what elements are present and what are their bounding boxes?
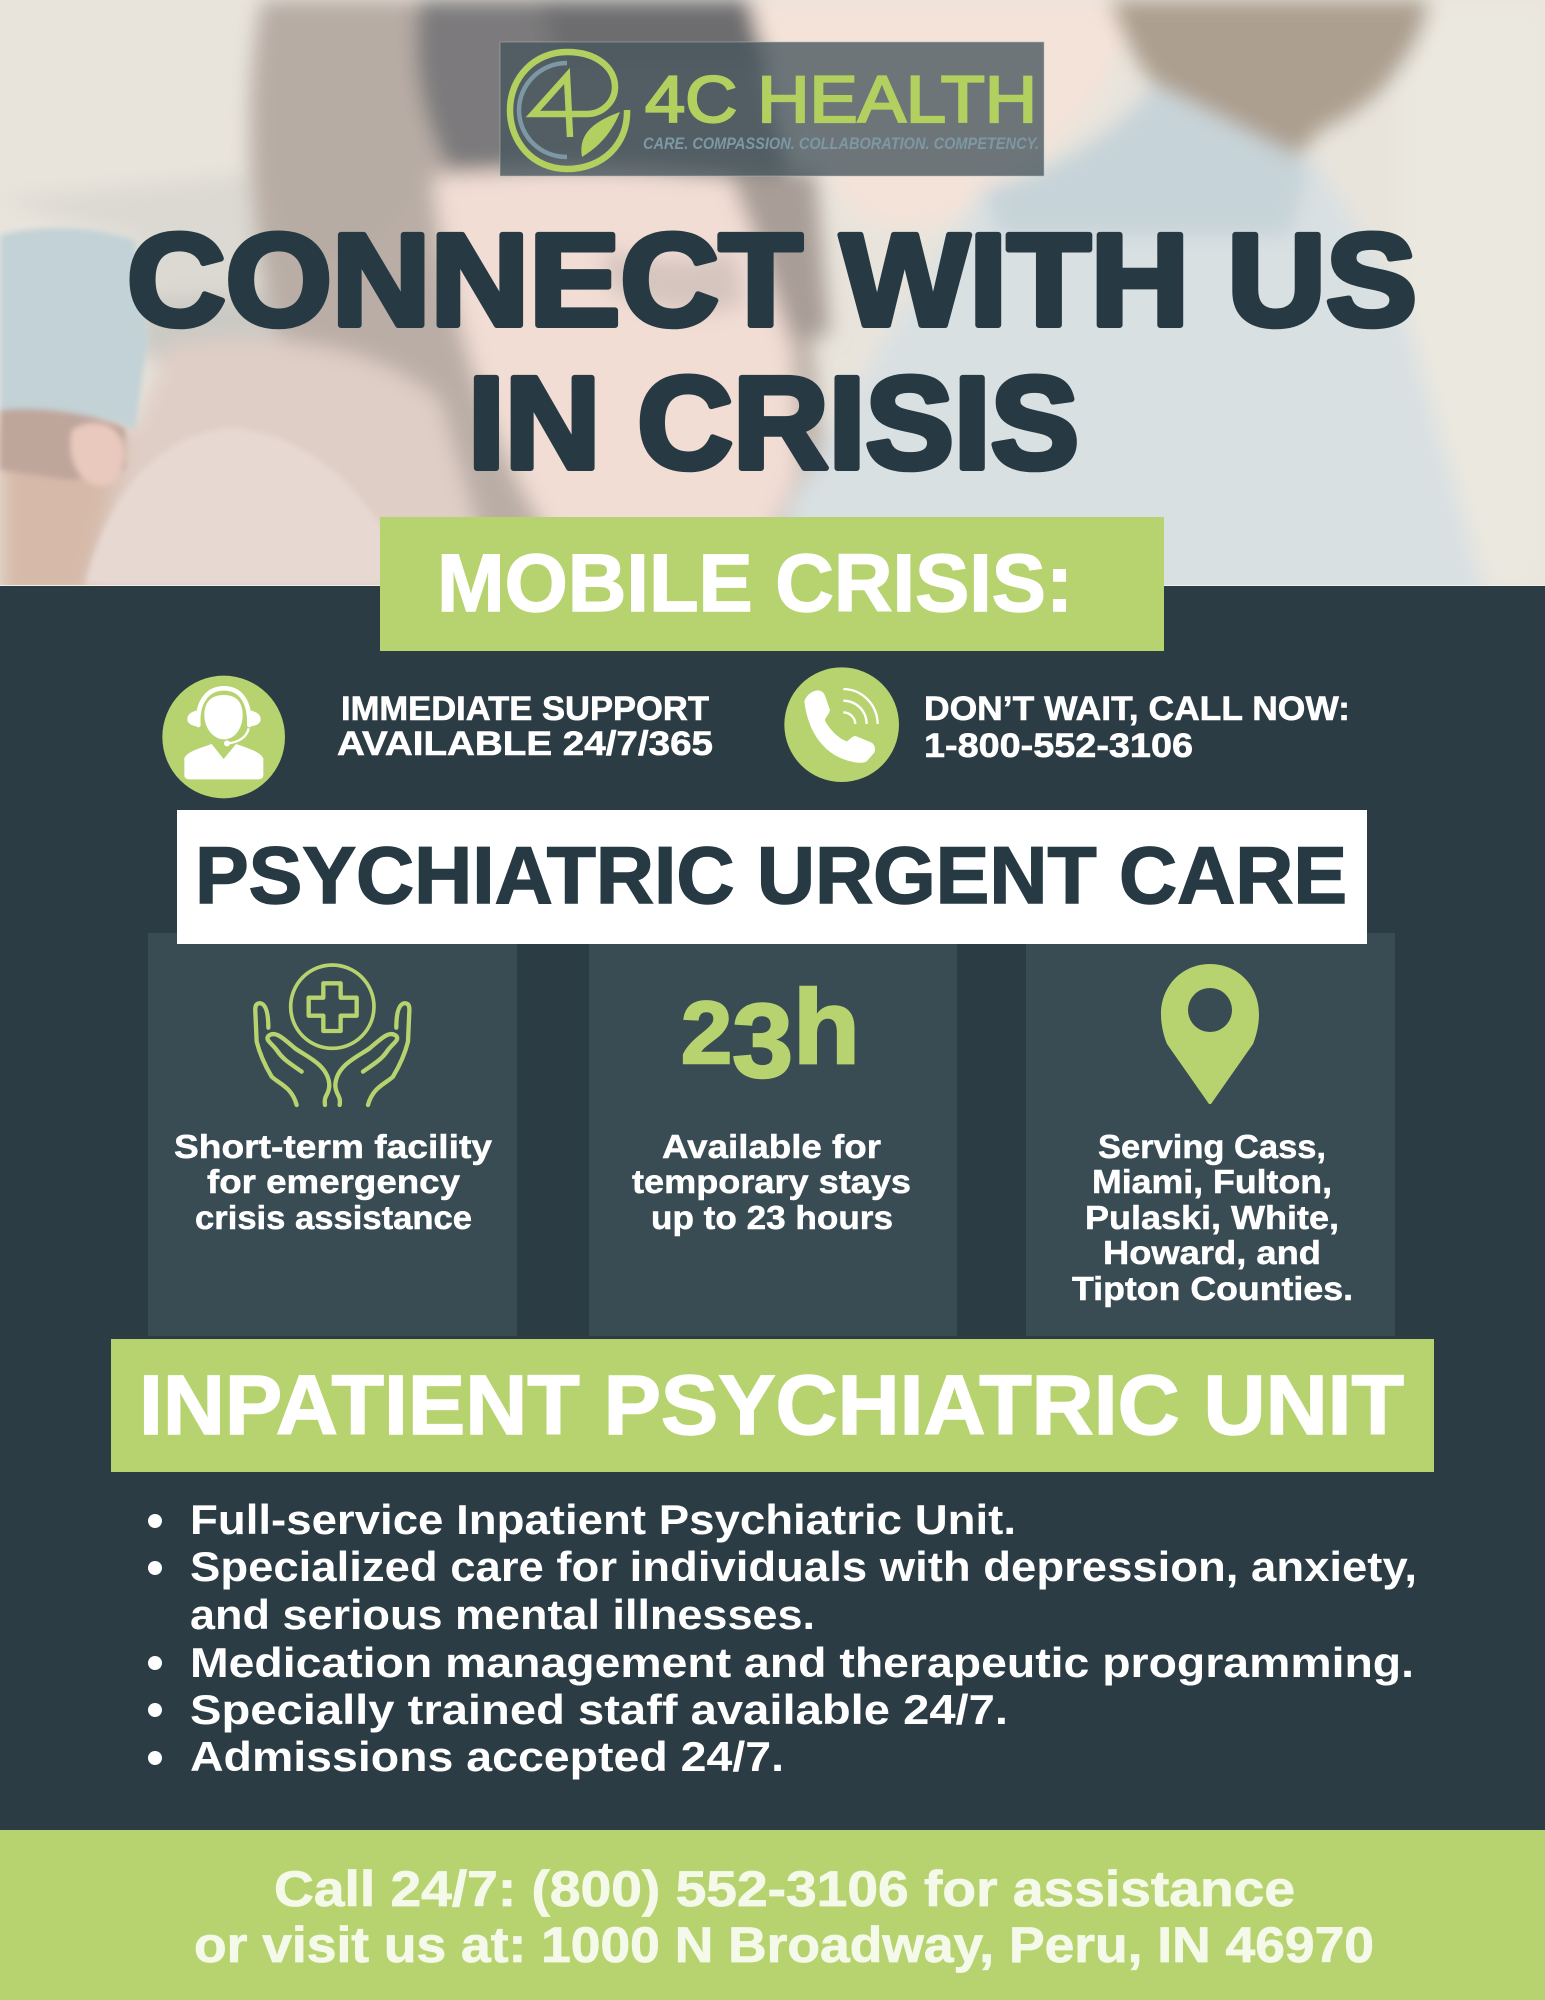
footer: contact banner: or visit us at: 1000 N Broadway, Peru, IN 46970 [194, 1917, 1374, 1973]
text: call now: 1-800-552-3106 [924, 727, 1193, 765]
icon: phone [784, 667, 899, 782]
logo mark [510, 52, 627, 169]
bullet list: inpatient services: Full-service Inpatient Psychiatric Unit. [190, 1496, 1016, 1543]
logo wordmark: 4C HEALTH [645, 62, 1037, 136]
panel text: Tipton Counties. [1072, 1270, 1353, 1307]
big number: 23h: 3 [732, 983, 793, 1100]
footer: contact banner: Call 24/7: (800) 552-3106 for assistance [274, 1861, 1295, 1917]
panel text [174, 1128, 493, 1236]
heading: psychiatric urgent care: PSYCHIATRIC URGENT CARE [195, 831, 1347, 921]
text: call now [924, 690, 1350, 765]
text: immediate support [337, 690, 713, 763]
panel text: Howard, and [1103, 1234, 1321, 1271]
panel text: crisis assistance [195, 1199, 472, 1236]
bullet list: inpatient services: Specialized care for individuals with depression, anxiety, [190, 1543, 1417, 1590]
icon: hands holding medical cross [255, 965, 409, 1105]
panel: short-term facility [148, 933, 517, 1336]
heading: psychiatric urgent care [177, 810, 1367, 944]
text: call now: DON’T WAIT, CALL NOW: [924, 690, 1350, 728]
logo tagline: CARE. COMPASSION. COLLABORATION. COMPETENCY. [643, 135, 1039, 153]
bullet list: inpatient services: Specially trained staff available 24/7. [190, 1686, 1008, 1733]
bullet list: inpatient services: Medication management and therapeutic programming. [190, 1639, 1414, 1686]
dark lower background [0, 587, 1545, 2000]
panel text: for emergency [207, 1163, 461, 1200]
bullet list: inpatient services: Admissions accepted 24/7. [190, 1733, 784, 1780]
big number: 23h: h [793, 969, 860, 1086]
bullet list: inpatient services: and serious mental illnesses. [190, 1591, 815, 1638]
title [127, 206, 1417, 496]
panel text: up to 23 hours [651, 1199, 893, 1236]
panel text: Pulaski, White, [1085, 1199, 1339, 1236]
panel text: Miami, Fulton, [1092, 1163, 1332, 1200]
panel text [1072, 1128, 1353, 1307]
logo: 4C Health [500, 42, 1044, 176]
icon: map pin [1161, 964, 1259, 1104]
panel text: Available for [662, 1128, 881, 1165]
icon: support agent with headset [162, 676, 285, 798]
heading: inpatient psychiatric unit [111, 1339, 1434, 1472]
heading: mobile crisis: MOBILE CRISIS: [437, 538, 1073, 629]
panel text: Serving Cass, [1098, 1128, 1326, 1165]
text: immediate support: IMMEDIATE SUPPORT [341, 690, 709, 728]
panel text: Short-term facility [174, 1128, 493, 1165]
footer: contact banner [0, 1830, 1545, 2000]
title: CONNECT WITH US [127, 206, 1417, 353]
heading: inpatient psychiatric unit: INPATIENT PSYCHIATRIC UNIT [139, 1358, 1404, 1452]
background photo: two women embracing [0, 0, 1545, 600]
bullet list: inpatient services [148, 1496, 1417, 1780]
panel text: temporary stays [632, 1163, 911, 1200]
panel text [632, 1128, 911, 1236]
panel: temporary stays [589, 933, 957, 1336]
panel: service area [1026, 933, 1395, 1336]
text: immediate support: AVAILABLE 24/7/365 [337, 725, 713, 763]
big number: 23h: 2 [681, 983, 732, 1082]
heading: mobile crisis [380, 517, 1164, 651]
title: IN CRISIS [468, 349, 1079, 496]
